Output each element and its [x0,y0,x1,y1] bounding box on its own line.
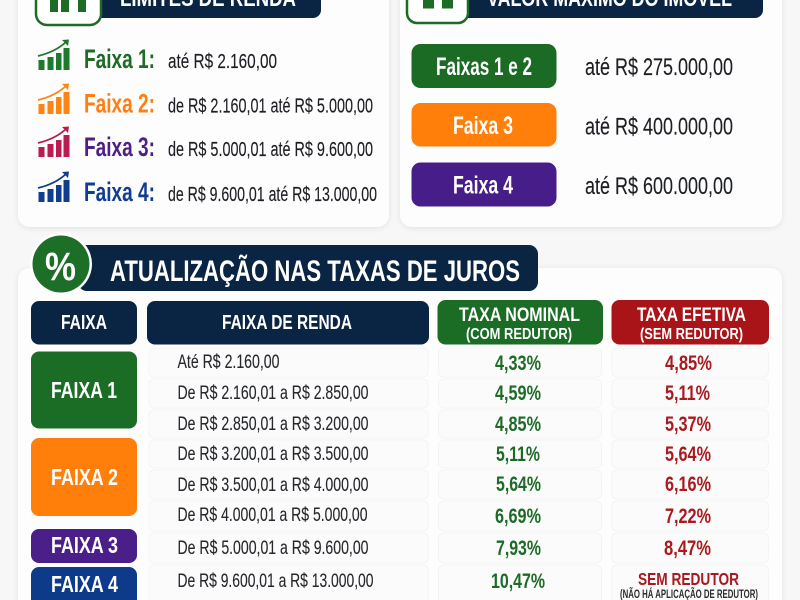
icon: percent badge: % [45,245,76,289]
table row 1: 4,33% [495,351,541,375]
row: faixa 1: até R$ 2.160,00 [168,50,277,73]
table header: taxa nominal: TAXA NOMINAL [459,304,580,326]
row: faixa 2: de R$ 2.160,01 até R$ 5.000,00 [168,94,373,118]
row: faixa 4 [412,162,733,206]
panel: limites de renda [18,0,389,227]
category: faixa 1: FAIXA 1 [51,377,117,403]
table header: faixa de renda [147,301,429,344]
row: faixa 3: Faixa 3 [453,112,513,140]
category: faixa 1 [31,352,137,428]
table row 5: 5,64% [496,472,541,496]
table row 7: De R$ 5.000,01 a R$ 9.600,00 [178,537,369,559]
row: faixa 3: Faixa 3: [84,132,155,162]
table row 8: SEM REDUTOR [638,569,739,589]
table row 5: 6,16% [665,472,711,496]
row: faixa 4 [38,172,377,207]
table header: taxa efetiva [612,300,769,344]
icon: percent badge [30,233,92,295]
panel: valor máximo do imóvel [400,0,782,227]
row: faixa 1: Faixa 1: [84,44,155,74]
row: faixas 1 e 2 [412,44,733,88]
table row 8: 10,47% [491,569,545,593]
table header: taxa nominal [438,300,603,344]
table row 1: 4,85% [665,351,712,375]
heading: atualização nas taxas de juros [30,233,538,295]
row: faixa 3 [38,126,373,162]
row: faixa 3: de R$ 5.000,01 até R$ 9.600,00 [168,138,373,161]
table row 2 [149,379,768,408]
row: faixa 3: até R$ 400.000,00 [585,114,733,140]
table header: faixa [31,301,137,344]
row: faixa 2: Faixa 2: [84,88,155,118]
category: faixa 4: FAIXA 4 [51,571,118,597]
table header: taxa nominal: (COM REDUTOR) [466,326,572,343]
row: faixa 2 [38,84,373,118]
table row 7 [149,533,768,563]
table header: taxa efetiva: TAXA EFETIVA [637,304,746,326]
table row 4: De R$ 3.200,01 a R$ 3.500,00 [178,443,369,465]
heading: limites de renda [36,0,321,25]
table row 2: 5,11% [665,381,710,405]
category: faixa 2: FAIXA 2 [51,464,118,490]
table row 3 [149,410,768,438]
row: faixa 1 [38,40,277,74]
heading: valor máximo do imóvel [407,0,763,23]
table row 4 [149,440,768,468]
table row 6 [149,501,768,531]
row: faixa 3 [412,103,733,146]
table row 6: De R$ 4.000,01 a R$ 5.000,00 [178,504,368,526]
category: faixa 2 [31,438,137,516]
table row 8: De R$ 9.600,01 a R$ 13.000,00 [178,570,374,592]
table row 3: 4,85% [495,412,541,436]
row: faixa 4: até R$ 600.000,00 [585,173,733,200]
table row 4: 5,64% [665,442,711,466]
table row 6: 7,22% [665,504,711,528]
table row 5 [149,470,768,499]
table row 3: 5,37% [665,412,711,436]
heading: atualização nas taxas de juros: ATUALIZAÇÃO NAS TAXAS DE JUROS [110,254,520,288]
panel: atualização nas taxas de juros [18,233,782,600]
category: faixa 3 [31,529,137,563]
table row 7: 7,93% [496,536,541,560]
row: faixa 4: Faixa 4 [453,172,513,200]
table header: faixa: FAIXA [61,312,107,334]
table row 3: De R$ 2.850,01 a R$ 3.200,00 [178,413,369,435]
row: faixa 4: de R$ 9.600,01 até R$ 13.000,00 [168,183,377,206]
table row 8 [149,565,768,600]
table row 7: 8,47% [664,536,711,560]
row: faixas 1 e 2: Faixas 1 e 2 [436,53,532,81]
row: faixas 1 e 2: até R$ 275.000,00 [585,54,733,81]
row: faixa 4: Faixa 4: [84,177,155,207]
table header: taxa efetiva: (SEM REDUTOR) [640,326,743,343]
table row 1 [149,348,768,377]
table row 4: 5,11% [496,442,540,466]
category: faixa 4 [31,567,137,600]
table row 2: 4,59% [495,381,541,405]
table row 6: 6,69% [495,504,541,528]
table header: faixa de renda: FAIXA DE RENDA [222,312,352,334]
category: faixa 3: FAIXA 3 [51,532,118,558]
table row 5: De R$ 3.500,01 a R$ 4.000,00 [178,474,369,496]
table row 1: Até R$ 2.160,00 [178,351,280,373]
table row 2: De R$ 2.160,01 a R$ 2.850,00 [178,382,369,404]
